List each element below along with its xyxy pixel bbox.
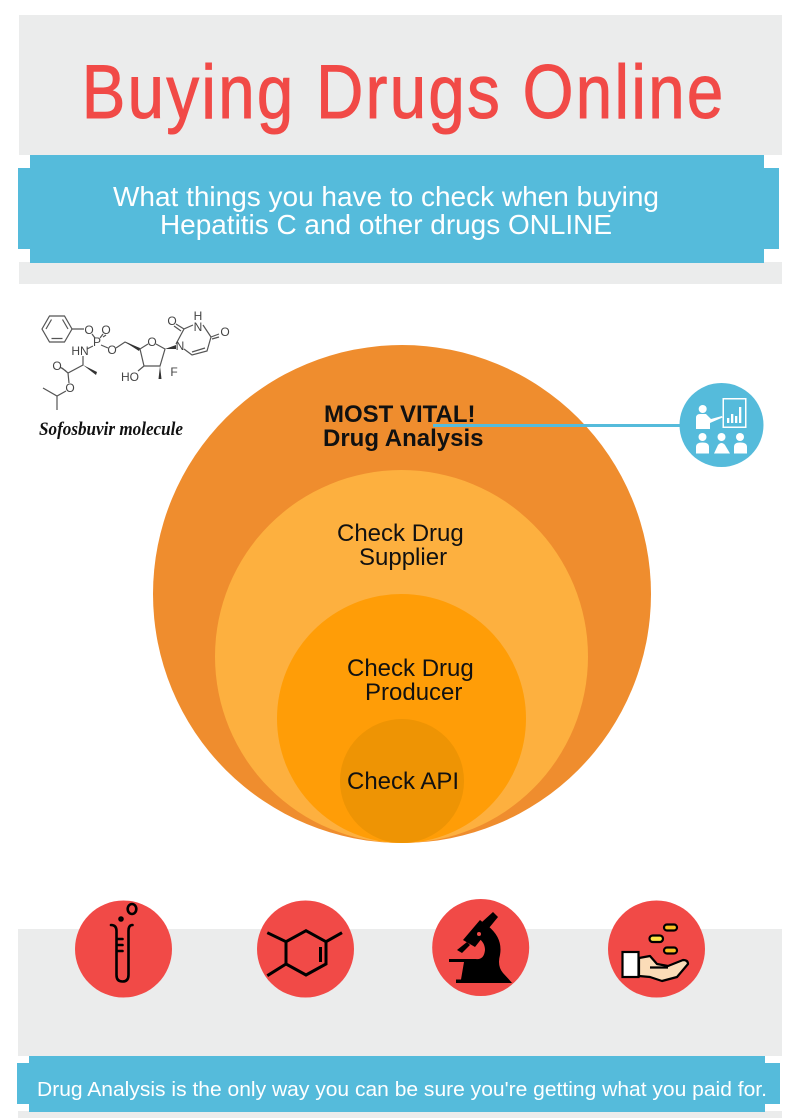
molecule atom labels: O — [84, 323, 94, 337]
label: drug analysis: MOST VITAL! — [324, 401, 476, 428]
bottom panel — [18, 929, 782, 1056]
footer banner — [17, 1056, 780, 1112]
molecule atom labels: O — [52, 359, 62, 373]
header panel — [19, 15, 782, 284]
circle: drug producer — [277, 594, 526, 843]
molecule caption: Sofosbuvir molecule — [39, 419, 184, 440]
footer text: Drug Analysis is the only way you can be sure you're getting what you paid for. — [37, 1078, 767, 1101]
circle: drug analysis — [153, 345, 651, 843]
molecule wedge bonds — [83, 342, 176, 379]
icon: molecule ring — [257, 900, 354, 998]
label: drug supplier: Supplier — [359, 544, 447, 571]
molecule atom labels: N — [176, 339, 184, 353]
molecule atom labels: P — [93, 335, 101, 349]
label: drug producer: Check Drug — [347, 655, 474, 682]
molecule structure — [42, 316, 219, 410]
icon: test tube — [75, 900, 172, 998]
molecule atom labels: O — [101, 323, 111, 337]
nested circle diagram — [153, 345, 651, 843]
molecule atom labels: HN — [71, 344, 89, 358]
molecule atom labels: O — [107, 343, 117, 357]
molecule atom labels: O — [167, 314, 177, 328]
molecule diagram — [42, 309, 230, 410]
icon: hand with pills — [608, 900, 705, 998]
subtitle text: Hepatitis C and other drugs ONLINE — [160, 209, 612, 240]
molecule atom labels: F — [170, 365, 178, 379]
label: drug supplier: Check Drug — [337, 520, 464, 547]
label: drug analysis: Drug Analysis — [323, 425, 484, 452]
circle: API — [340, 719, 464, 843]
molecule atom labels: N — [194, 320, 202, 334]
title: Buying Drugs Online — [82, 50, 723, 135]
subtitle text: What things you have to check when buying — [113, 181, 659, 212]
molecule atom labels: H — [194, 309, 202, 323]
molecule atom labels: O — [147, 335, 157, 349]
molecule atom labels: O — [65, 381, 75, 395]
subtitle banner — [18, 155, 779, 263]
circle: drug supplier — [215, 470, 588, 843]
label: API: Check API — [347, 768, 459, 795]
connector line — [433, 424, 683, 427]
icon: presentation — [680, 383, 764, 467]
label: drug producer: Producer — [365, 679, 462, 706]
molecule atom labels — [52, 309, 230, 395]
icon: microscope — [432, 899, 529, 996]
molecule atom labels: HO — [121, 370, 139, 384]
molecule atom labels: O — [220, 325, 230, 339]
